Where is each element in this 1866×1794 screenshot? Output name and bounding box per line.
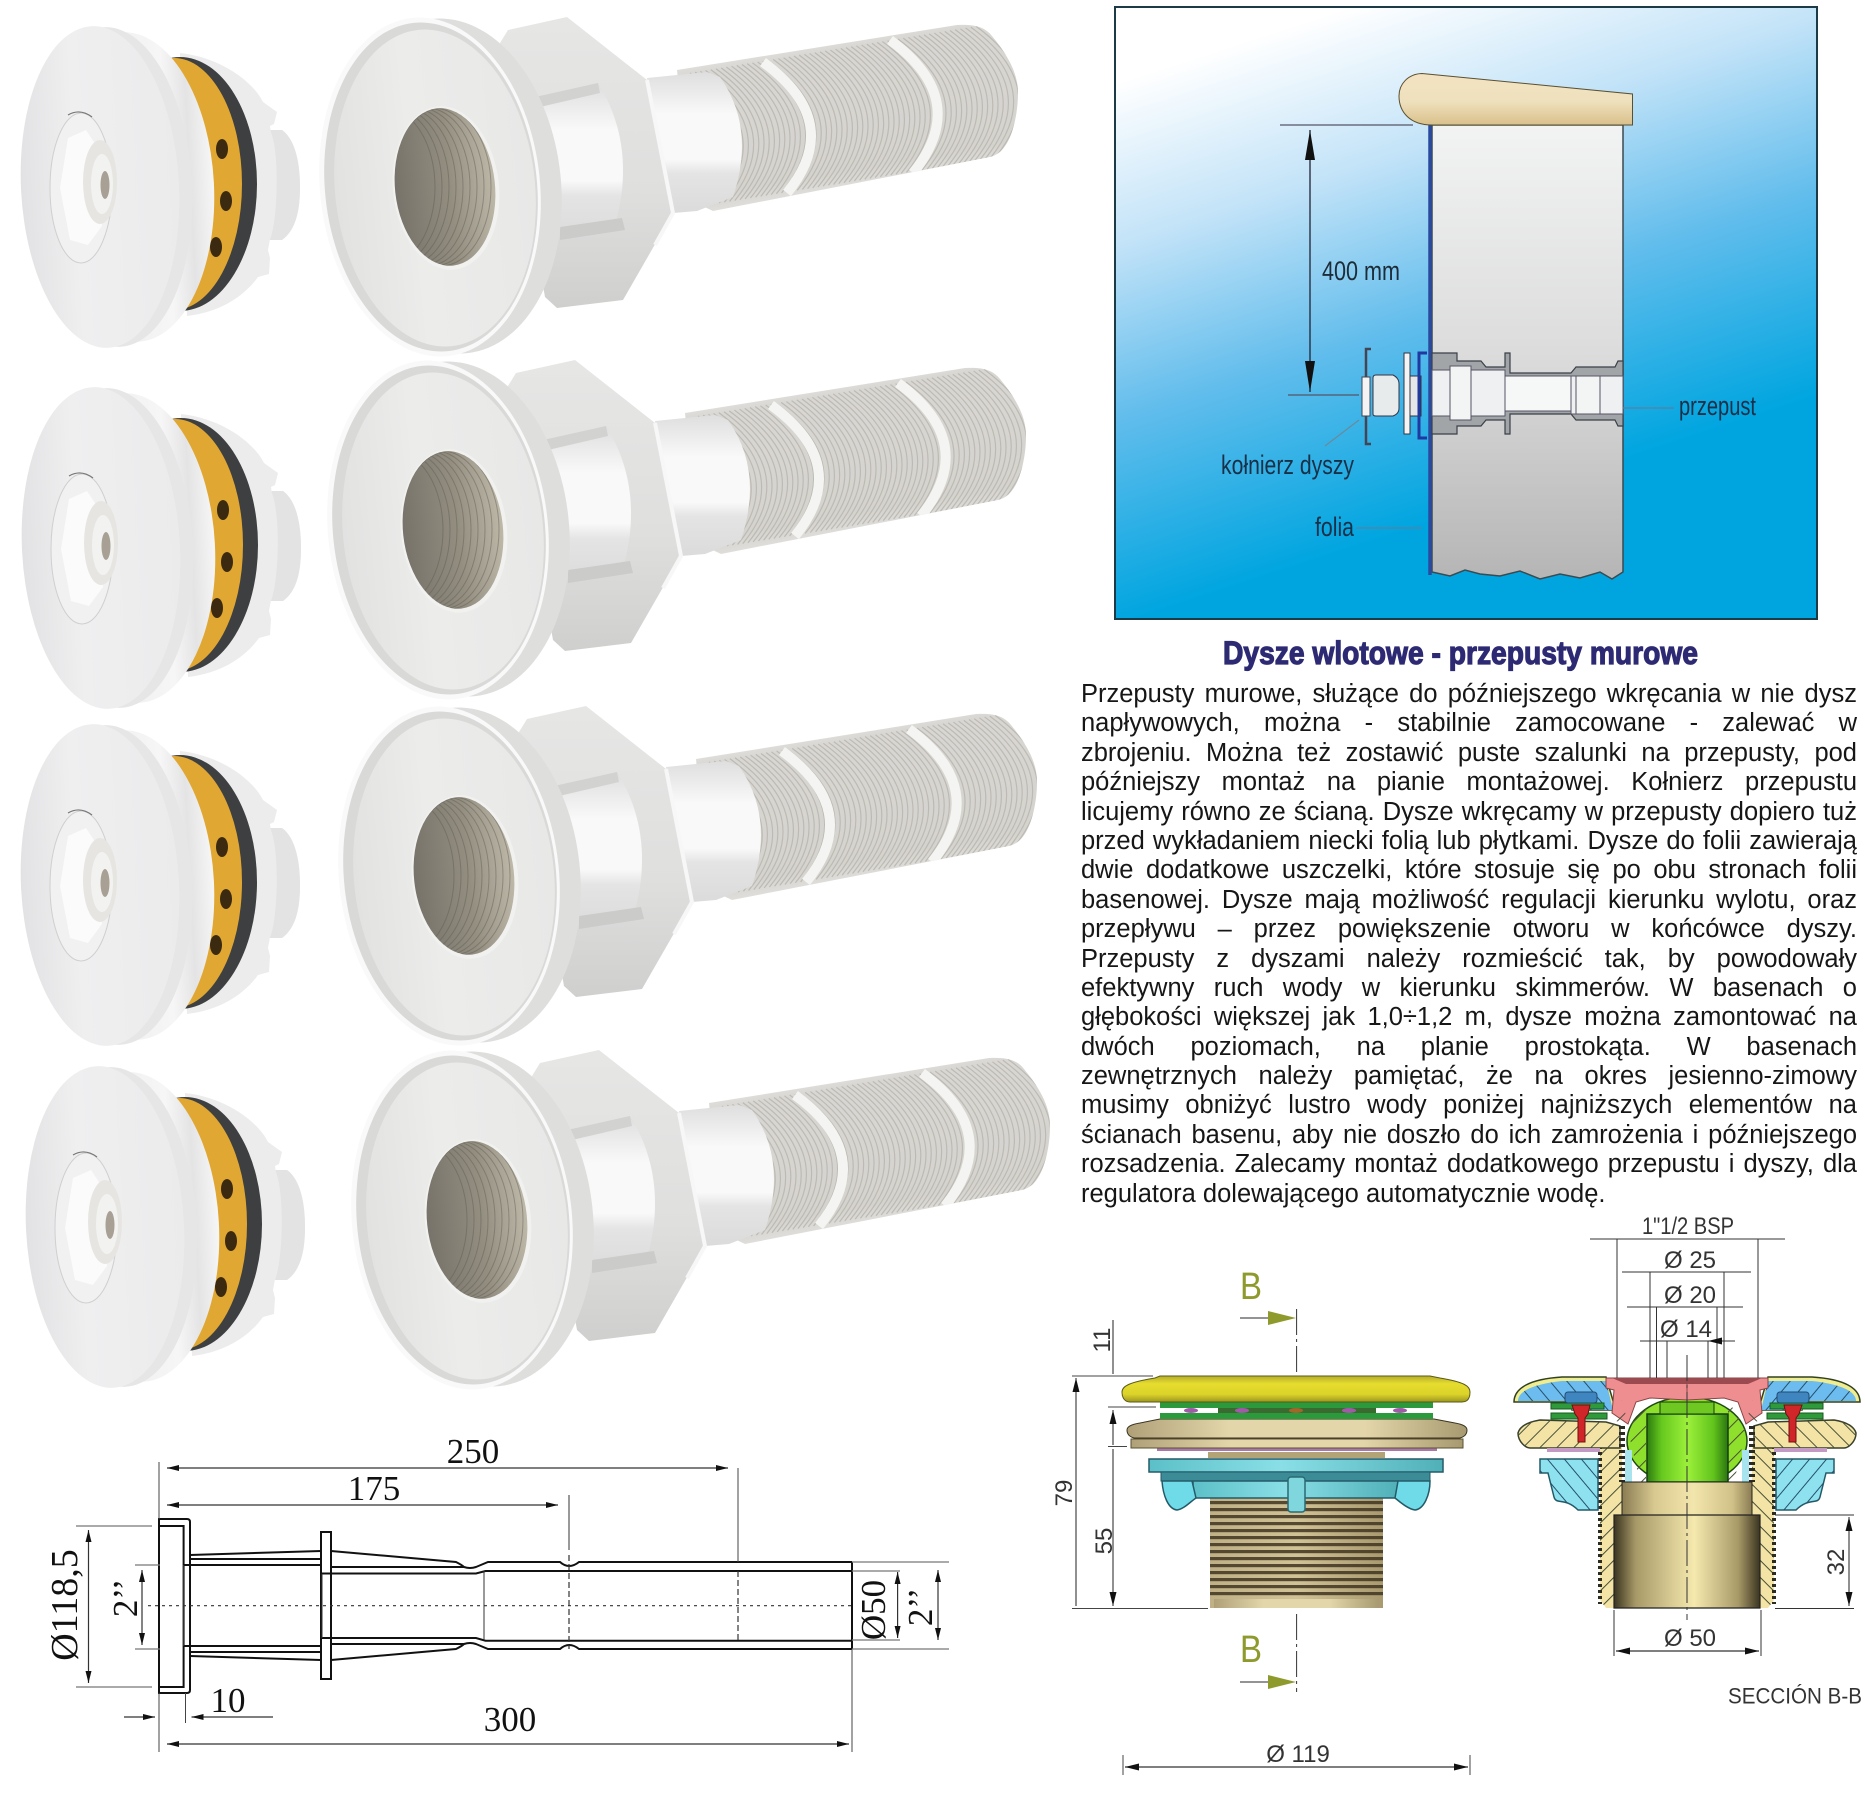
product row 3: wall passage	[322, 695, 1048, 1057]
label: kołnierz dyszy	[1221, 420, 1359, 480]
description text block: dwie dodatkowe uszczelki, które stosuje się po obu stronach folii	[1081, 856, 1857, 884]
description text block: Przepusty z dyszami należy rozmieścić tak, by powodowały	[1081, 945, 1857, 973]
description text block: przed wykładaniem niecki folią lub płytkami. Dysze do folii zawierają	[1081, 827, 1857, 855]
label: przepust	[1623, 391, 1756, 421]
description text block: napływowych, można - stabilnie zamocowane - zalewać w	[1081, 709, 1857, 737]
pool wall	[1432, 125, 1623, 579]
product row 1: nozzle	[13, 22, 300, 352]
description text block: licujemy równo ze ścianą. Dysze wkręcamy w przepusty dopiero tuż	[1081, 798, 1857, 826]
description text block: musimy obniżyć lustro wody poniżej najniższych elementów na	[1081, 1091, 1857, 1119]
dimension: 400 mm: 400 mm	[1322, 256, 1400, 286]
technical drawing: nozzle side view	[1122, 1376, 1470, 1608]
dimensions: section B-B: 32	[1823, 1549, 1850, 1575]
dimensions: side view	[1051, 1320, 1470, 1775]
description text block: głębokości większej jak 1,0÷1,2 m, dysze można zamontować na	[1081, 1003, 1857, 1031]
dimensions: section B-B: Ø 14	[1660, 1316, 1712, 1343]
description text block: przepływu – przez powiększenie otworu w końcówce dyszy.	[1081, 915, 1857, 943]
product row 2: wall passage	[311, 349, 1037, 711]
technical drawing: passage dimensions: 300	[484, 1700, 536, 1739]
technical drawing: passage dimensions: Ø50	[854, 1580, 893, 1640]
technical drawing: passage dimensions: 175	[348, 1469, 400, 1508]
label: kołnierz dyszy: kołnierz dyszy	[1221, 450, 1354, 480]
technical drawing: passage dimensions: Ø118,5	[44, 1549, 86, 1661]
description text block: basenowej. Dysze mają możliwość regulacji kierunku wylotu, oraz	[1081, 886, 1857, 914]
section arrows B-B: B	[1240, 1266, 1262, 1308]
description text block: zewnętrznych należy pamiętać, że na okres jesienno-zimowy	[1081, 1062, 1857, 1090]
foil liner	[1428, 125, 1432, 575]
description text block: regulatora dolewającego automatycznie wodę.	[1081, 1180, 1606, 1208]
heading: Dysze wlotowe - przepusty murowe	[1223, 635, 1698, 671]
technical drawing: passage dimensions: 250	[447, 1432, 499, 1471]
technical drawing: passage dimensions: 2’’	[901, 1588, 940, 1626]
panel: pool wall installation diagram	[1115, 7, 1817, 619]
product row 4: wall passage	[335, 1039, 1061, 1401]
dimensions: section B-B: 1"1/2 BSP	[1642, 1213, 1734, 1240]
technical drawing: passage dimensions	[44, 1432, 949, 1752]
technical drawing: passage dimensions: 10	[210, 1681, 246, 1720]
description text block: zbrojeniu. Można też zostawić puste szalunki na przepusty, pod	[1081, 739, 1857, 767]
description text block: efektywny ruch wody w kierunku skimmerów. W basenach o	[1081, 974, 1857, 1002]
label: folia: folia	[1315, 512, 1355, 542]
dimensions: section B-B: Ø 25	[1664, 1247, 1716, 1274]
product row 2: nozzle	[14, 383, 301, 713]
dimensions: side view: 55	[1091, 1528, 1118, 1554]
coping stone	[1399, 74, 1632, 125]
dimension: 400 mm	[1280, 125, 1413, 395]
dimensions: side view: 79	[1051, 1480, 1078, 1506]
description text block	[1081, 680, 1858, 1208]
dimensions: section B-B	[1590, 1213, 1862, 1708]
description text block: późniejszy montaż na pianie montażowej. Kołnierz przepustu	[1081, 768, 1857, 796]
description text block: rozsadzenia. Zalecamy montaż dodatkowego przepustu i dyszy, dla	[1081, 1150, 1857, 1178]
label: folia	[1315, 512, 1422, 542]
product row 1: wall passage	[303, 6, 1029, 368]
dimensions: section B-B: Ø 20	[1664, 1282, 1716, 1309]
description text block: ścianach basenu, aby nie doszło do ich zamrożenia i późniejszego	[1081, 1121, 1857, 1149]
description text block: Przepusty murowe, służące do późniejszego wkręcania w nie dysz	[1081, 680, 1857, 708]
dimensions: section B-B: Ø 50	[1664, 1625, 1716, 1652]
description text block: dwóch poziomach, na planie prostokąta. W basenach	[1081, 1033, 1857, 1061]
section arrows B-B: B	[1240, 1629, 1262, 1671]
product row 4: nozzle	[18, 1062, 305, 1392]
label: przepust: przepust	[1679, 391, 1756, 421]
dimensions: side view: Ø 119	[1266, 1741, 1330, 1768]
dimensions: side view: 11	[1089, 1328, 1116, 1352]
passage and nozzle cross-section	[1362, 349, 1623, 444]
section arrows B-B	[1240, 1266, 1297, 1692]
technical drawing: passage dimensions: 2’’	[106, 1579, 145, 1617]
product row 3: nozzle	[13, 720, 300, 1050]
technical drawing: section B-B	[1514, 1355, 1860, 1620]
